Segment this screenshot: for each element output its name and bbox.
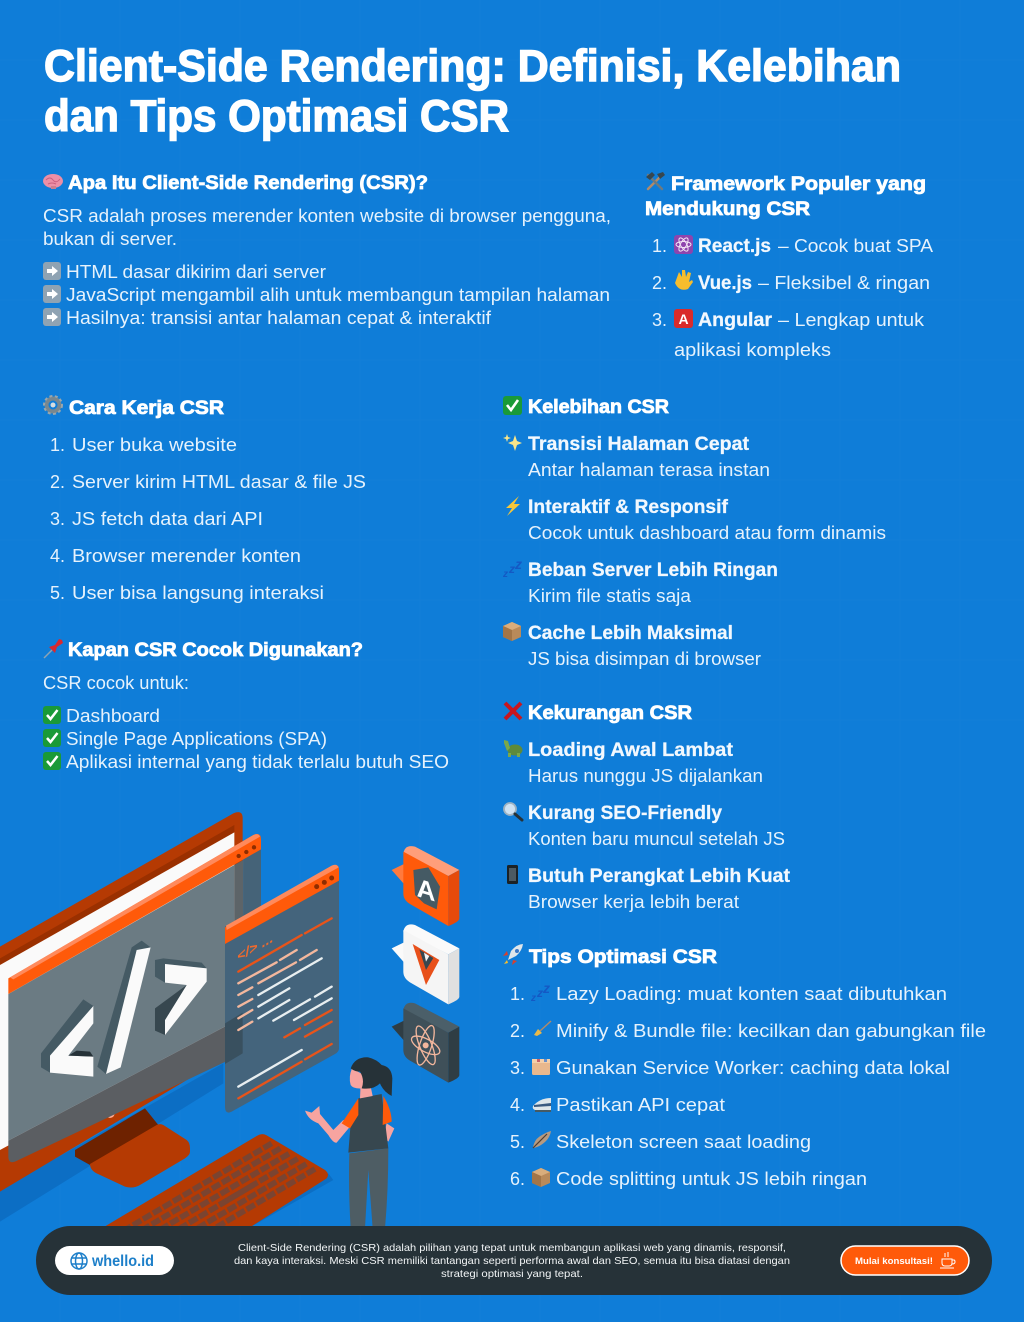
panel: kekurangan CSR	[504, 702, 791, 912]
item: beban server: Kirim file statis saja	[528, 585, 692, 606]
icon: gear	[44, 396, 62, 414]
item: interaktif	[506, 496, 886, 543]
tip 4: 4.	[510, 1094, 525, 1115]
tip 5: 5.	[510, 1131, 525, 1152]
item: loading awal: Loading Awal Lambat	[528, 739, 734, 761]
list item: vue: 2.	[652, 272, 667, 293]
tip 1: z	[536, 986, 543, 1000]
monitor shadow	[0, 1063, 223, 1222]
item: loading awal	[504, 739, 763, 786]
title: Client-Side Rendering: Definisi, Kelebihan	[44, 42, 901, 91]
list: langkah: 3.	[50, 508, 65, 529]
keyboard	[102, 1134, 333, 1228]
list item: react: 1.	[652, 235, 667, 256]
icon: pin	[44, 639, 63, 658]
list: cocok untuk	[43, 705, 449, 772]
list: langkah: 5.	[50, 582, 65, 603]
item: beban server: Beban Server Lebih Ringan	[528, 559, 778, 581]
tip 6: 6.	[510, 1168, 525, 1189]
panel: cara kerja CSR	[44, 396, 366, 603]
heading: apa itu CSR: Apa Itu Client-Side Rendering (CSR)?	[68, 172, 428, 194]
heading: kelebihan: Kelebihan CSR	[528, 396, 669, 418]
tip 3: Gunakan Service Worker: caching data lokal	[556, 1057, 950, 1078]
tip 2: 2.	[510, 1020, 525, 1041]
footer text: strategi optimasi yang tepat.	[441, 1268, 583, 1280]
footer bar	[36, 1226, 992, 1295]
list item: react: React.js	[698, 235, 771, 257]
item: loading awal: Harus nunggu JS dijalankan	[528, 765, 763, 786]
floating code panel	[225, 865, 339, 1113]
list item: vue: – Fleksibel & ringan	[758, 272, 930, 293]
list item: angular: A	[678, 311, 689, 327]
list: cocok untuk: Dashboard	[66, 705, 160, 726]
list: langkah: User bisa langsung interaksi	[72, 582, 324, 603]
tip 2: Minify & Bundle file: kecilkan dan gabungkan file	[556, 1020, 986, 1041]
icon: angular bubble	[392, 846, 459, 926]
item: kurang SEO: Konten baru muncul setelah JS	[528, 828, 785, 849]
code symbol on monitor	[41, 941, 207, 1077]
text: definisi	[43, 205, 611, 249]
heading: framework: Framework Populer yang	[671, 173, 926, 195]
panel: kapan CSR cocok	[43, 639, 449, 772]
item: transisi: Antar halaman terasa instan	[528, 459, 770, 480]
tip 1: 1.	[510, 983, 525, 1004]
icon: vue bubble	[392, 924, 459, 1004]
tip 1: z	[542, 980, 550, 996]
list item: angular: – Lengkap untuk	[778, 309, 925, 330]
icon: angular bubble: A	[417, 873, 435, 907]
list: langkah: User buka website	[72, 434, 237, 455]
monitor stand	[75, 1108, 190, 1188]
illustration: developer with monitor	[0, 812, 459, 1228]
list: alur CSR: HTML dasar dikirim dari server	[66, 261, 326, 282]
item: cache	[503, 622, 761, 669]
title: dan Tips Optimasi CSR	[44, 92, 509, 141]
panel: framework populer	[645, 172, 934, 360]
list: langkah: Server kirim HTML dasar & file JS	[72, 471, 366, 492]
heading: framework: Mendukung CSR	[645, 198, 810, 220]
item: interaktif: Cocok untuk dashboard atau form dinamis	[528, 522, 886, 543]
list item: react	[652, 235, 934, 257]
item: transisi: Transisi Halaman Cepat	[528, 433, 749, 455]
tip 6: Code splitting untuk JS lebih ringan	[556, 1168, 867, 1189]
list item: react: – Cocok buat SPA	[778, 235, 934, 256]
tip 1: Lazy Loading: muat konten saat dibutuhkan	[556, 983, 947, 1004]
heading: framework	[645, 173, 926, 220]
button: mulai konsultasi	[841, 1246, 969, 1275]
heading: tips: Tips Optimasi CSR	[529, 946, 717, 968]
panel: apa itu CSR	[43, 172, 611, 328]
list: alur CSR	[43, 261, 610, 328]
list item: vue	[652, 270, 930, 294]
list: langkah: JS fetch data dari API	[72, 508, 263, 529]
logo pill: whello.id	[55, 1246, 174, 1275]
icon: react bubble	[392, 1003, 459, 1083]
footer text: dan kaya interaksi. Meski CSR memiliki tantangan seperti performa awal dan SEO, semua itu bisa diatasi dengan	[234, 1255, 790, 1267]
item: beban server: z	[502, 569, 508, 580]
item: beban server: z	[508, 562, 515, 576]
footer text: Client-Side Rendering (CSR) adalah pilihan yang tepat untuk membangun aplikasi web yang dinamis, responsif,	[238, 1242, 786, 1254]
tip 4: Pastikan API cepat	[556, 1094, 725, 1115]
tip 1: z	[530, 993, 536, 1004]
item: kurang SEO	[504, 802, 785, 849]
button: mulai konsultasi: Mulai konsultasi!	[855, 1256, 933, 1267]
tip 3: 3.	[510, 1057, 525, 1078]
icon: rocket	[503, 944, 523, 965]
panel: kelebihan CSR	[502, 396, 886, 669]
item: interaktif: Interaktif & Responsif	[528, 496, 728, 518]
list item: angular: aplikasi kompleks	[674, 339, 831, 360]
browser window on monitor	[8, 834, 261, 1162]
item: beban server	[502, 556, 778, 606]
logo pill: whello.id: whello.id	[91, 1253, 154, 1270]
icon: brain	[43, 174, 63, 189]
item: transisi	[503, 433, 770, 480]
item: cache: JS bisa disimpan di browser	[528, 648, 761, 669]
item: butuh perangkat: Butuh Perangkat Lebih Kuat	[528, 865, 791, 887]
tip 5: Skeleton screen saat loading	[556, 1131, 811, 1152]
icon: cross	[505, 703, 521, 719]
title	[44, 42, 901, 141]
text: definisi: bukan di server.	[43, 228, 177, 249]
monitor frame	[0, 812, 243, 1192]
item: kurang SEO: Kurang SEO-Friendly	[528, 802, 722, 824]
text: definisi: CSR adalah proses merender konten website di browser pengguna,	[43, 205, 611, 226]
heading: kapan: Kapan CSR Cocok Digunakan?	[68, 639, 363, 661]
list item: angular	[652, 309, 925, 360]
item: butuh perangkat: Browser kerja lebih berat	[528, 891, 739, 912]
heading: kekurangan: Kekurangan CSR	[528, 702, 692, 724]
list: cocok untuk: Single Page Applications (SPA)	[66, 728, 327, 749]
list: langkah: 4.	[50, 545, 65, 566]
icon: check	[503, 396, 522, 415]
list: langkah: 2.	[50, 471, 65, 492]
heading: cara kerja: Cara Kerja CSR	[69, 397, 224, 419]
list: alur CSR: Hasilnya: transisi antar halaman cepat & interaktif	[66, 307, 492, 328]
list: langkah: 1.	[50, 434, 65, 455]
list: langkah	[50, 434, 366, 603]
list item: vue: Vue.js	[698, 272, 752, 294]
woman figure	[305, 1057, 394, 1228]
item: butuh perangkat	[507, 865, 791, 912]
icon: tools	[646, 172, 665, 189]
list: alur CSR: JavaScript mengambil alih untuk membangun tampilan halaman	[66, 284, 610, 305]
text: intro: CSR cocok untuk:	[43, 672, 189, 693]
list item: angular: 3.	[652, 309, 667, 330]
item: cache: Cache Lebih Maksimal	[528, 622, 733, 644]
list item: angular: Angular	[698, 309, 772, 331]
item: beban server: z	[514, 556, 522, 572]
list: cocok untuk: Aplikasi internal yang tidak terlalu butuh SEO	[66, 751, 449, 772]
list: langkah: Browser merender konten	[72, 545, 301, 566]
floating code panel: </> ...	[237, 930, 273, 965]
panel: tips optimasi	[503, 944, 986, 1189]
footer text	[234, 1242, 790, 1280]
